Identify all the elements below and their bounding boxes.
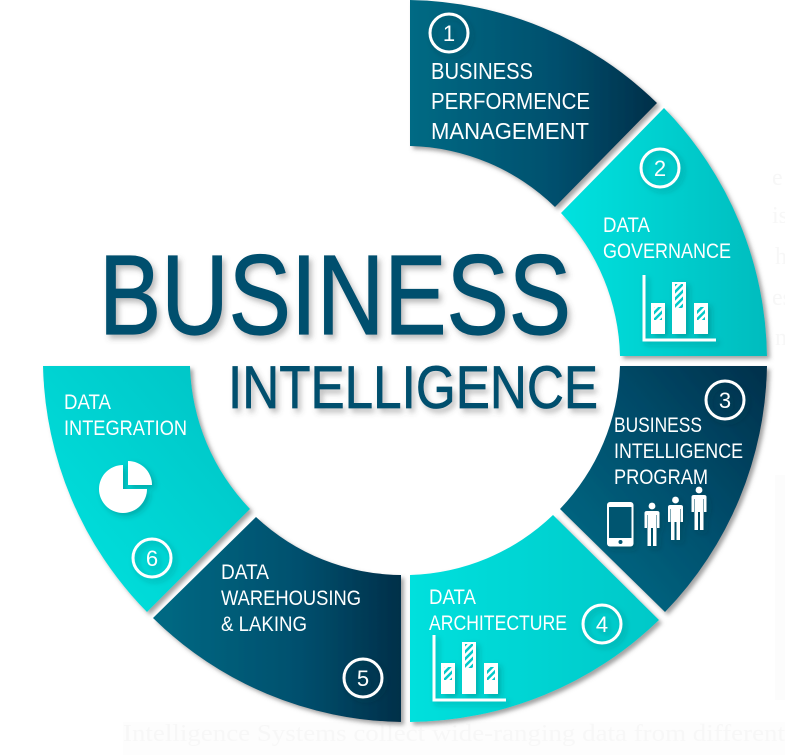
badge 1: 1 <box>443 21 455 46</box>
icon: phone <box>608 503 632 546</box>
label 4: ARCHITECTURE <box>429 611 567 635</box>
badge 4: 4 <box>596 612 608 637</box>
icon: bar chart <box>434 635 506 700</box>
label 1: MANAGEMENT <box>431 118 589 144</box>
segment shape 1 <box>410 0 657 207</box>
title <box>99 232 598 421</box>
label 4: DATA <box>429 585 477 609</box>
icon: people <box>644 487 706 546</box>
label 5: DATA <box>221 560 270 584</box>
label 5: & LAKING <box>221 612 307 636</box>
label 5 <box>221 560 361 636</box>
label 3 <box>614 413 743 489</box>
panel: 6 data integration <box>43 366 250 612</box>
label 1: BUSINESS <box>431 58 533 84</box>
segment shape 4 <box>410 515 659 722</box>
segment shape 5 <box>153 517 401 722</box>
label 3: PROGRAM <box>614 465 708 489</box>
faint background text: Intelligence Systems collect wide-ranging data from different <box>123 721 785 747</box>
badge 2: 2 <box>654 156 666 181</box>
badge 5: 5 <box>357 666 369 691</box>
label 2 <box>603 213 731 263</box>
label 4 <box>429 585 567 635</box>
segment shape 2 <box>561 108 767 356</box>
badge 4 <box>583 605 621 643</box>
panel: 4 data architecture <box>410 515 659 722</box>
badge 6 <box>133 539 171 577</box>
label 2: DATA <box>603 213 651 237</box>
badge 2 <box>641 149 679 187</box>
panel: 2 data governance <box>561 108 767 356</box>
label 6: DATA <box>64 390 112 414</box>
icon: pie chart <box>99 461 152 513</box>
label 1 <box>431 58 590 144</box>
faint background text <box>123 165 785 755</box>
badge 5 <box>344 659 382 697</box>
title: INTELLIGENCE <box>228 354 598 421</box>
faint background text: e <box>772 165 783 191</box>
panel: 5 data warehousing and laking <box>153 517 401 722</box>
label 3: BUSINESS <box>614 413 702 437</box>
segment shape 3 <box>560 366 767 612</box>
label 5: WAREHOUSING <box>221 586 361 610</box>
badge 3 <box>706 381 744 419</box>
badge 1 <box>430 14 468 52</box>
badge 6: 6 <box>146 546 158 571</box>
label 6: INTEGRATION <box>64 416 187 440</box>
title: BUSINESS <box>99 232 571 358</box>
label 3: INTELLIGENCE <box>614 439 743 463</box>
panel: 1 business performence management <box>410 0 657 207</box>
label 1: PERFORMENCE <box>431 88 590 114</box>
badge 3: 3 <box>719 388 731 413</box>
panel: 3 business intelligence program <box>560 366 767 612</box>
label 6 <box>64 390 187 440</box>
segment shape 6 <box>43 366 250 612</box>
label 2: GOVERNANCE <box>603 239 731 263</box>
icon: bar chart <box>644 275 716 340</box>
